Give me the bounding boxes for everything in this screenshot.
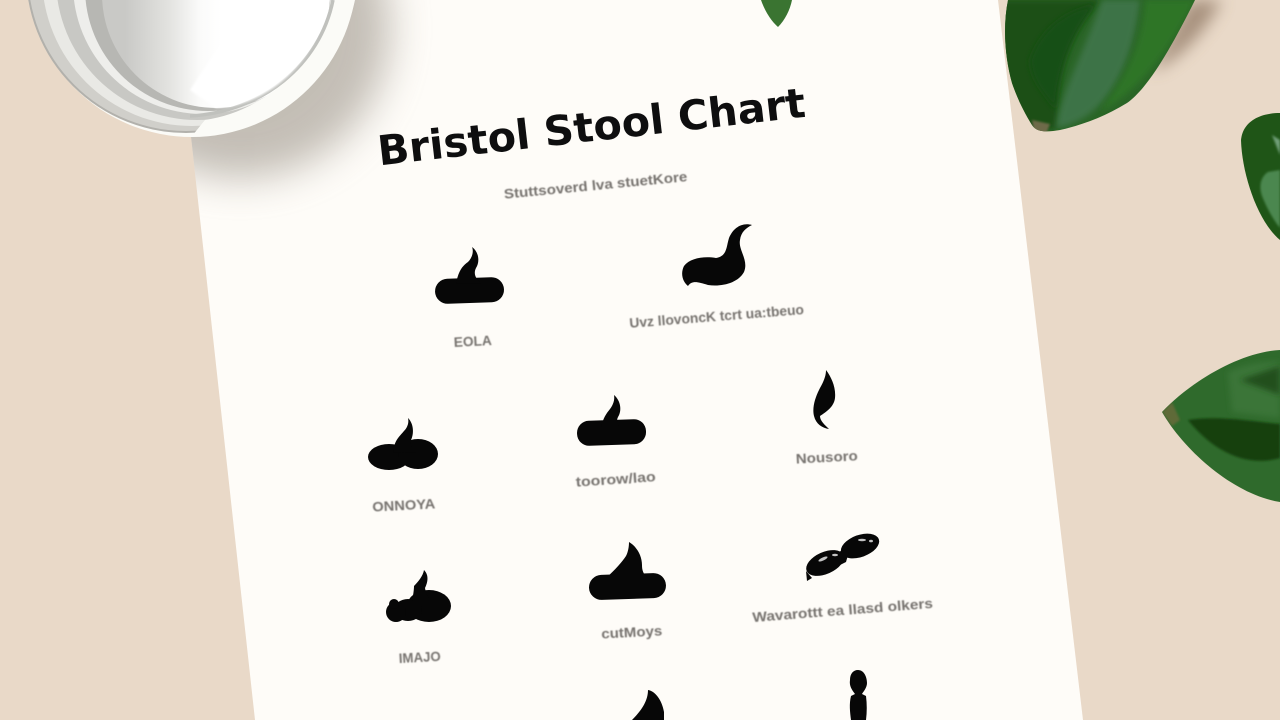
- icon: stool type 4: [577, 395, 646, 446]
- glass of water: [27, 0, 357, 137]
- leaf shadow: [1150, 0, 1222, 72]
- icon: stool type 8: [802, 529, 883, 581]
- icon: stool type 3: [368, 418, 438, 470]
- icon: stool type 2: [682, 224, 752, 286]
- icon: stool type 9: [632, 690, 664, 720]
- leaf: top right: [1000, 0, 1200, 135]
- icon: stool type 1: [435, 247, 504, 304]
- label: type 4: toorow/lao: [575, 468, 656, 490]
- leaf: right middle: [1241, 113, 1280, 240]
- label: type 7: cutMoys: [601, 622, 663, 642]
- title: Bristol Stool Chart: [375, 79, 808, 175]
- label: type 8: Wavarottt ea llasd olkers: [752, 595, 934, 625]
- label: type 6: IMAJO: [398, 648, 441, 666]
- icon: stool type 5: [813, 370, 835, 429]
- label: type 3: ONNOYA: [372, 495, 436, 515]
- label: type 1: EOLA: [453, 332, 492, 350]
- label: type 2: Uvz llovoncK tcrt ua:tbeuo: [629, 301, 804, 331]
- subtitle: Stuttsoverd lva stuetKore: [503, 168, 688, 202]
- glass shadow: [191, 0, 411, 200]
- paper sheet: [176, 0, 1083, 720]
- icon: stool type 7: [589, 542, 666, 600]
- top leaf tip: [761, 0, 792, 27]
- leaf: right lower: [1160, 348, 1280, 504]
- label: type 5: Nousoro: [795, 447, 858, 467]
- icon: stool type 10: [850, 670, 867, 720]
- icon: stool type 6: [386, 570, 451, 622]
